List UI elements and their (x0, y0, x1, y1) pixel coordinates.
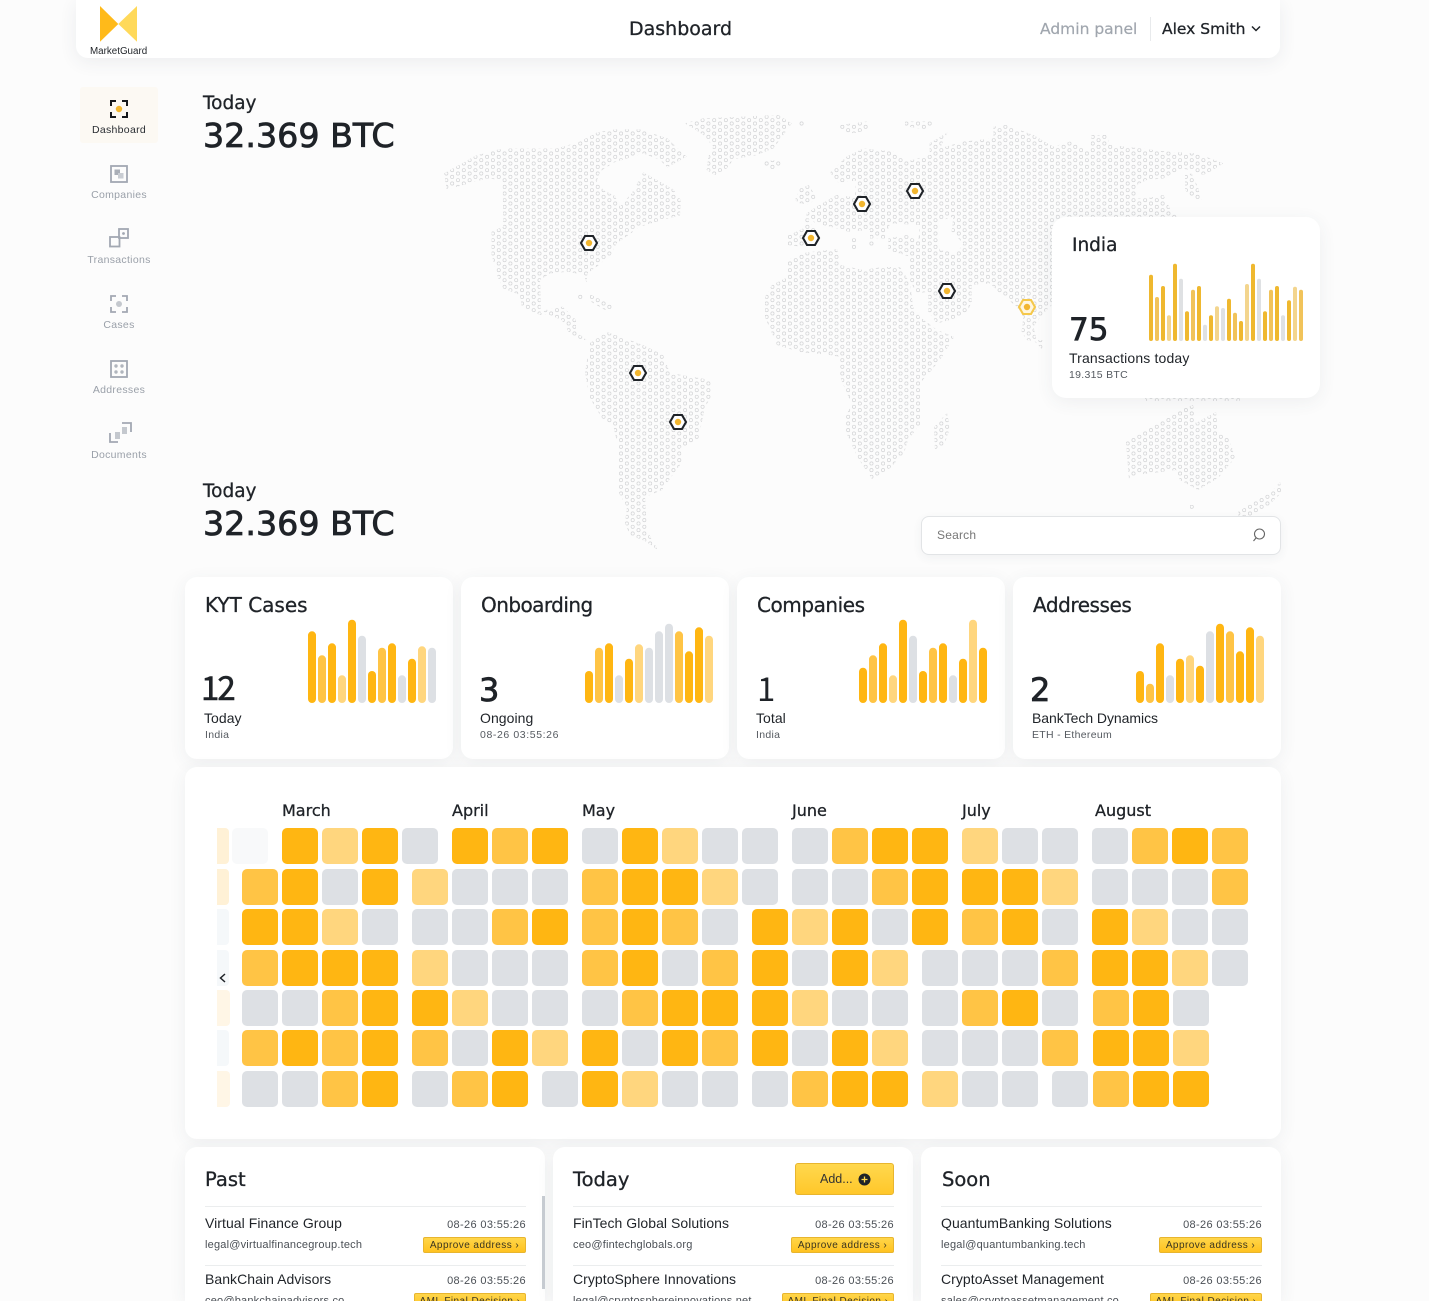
panel: india card (1052, 217, 1320, 398)
soon row 1: Approve address › (1166, 1240, 1255, 1251)
past row 1: legal@virtualfinancegroup.tech (205, 1239, 362, 1251)
soon row 2: CryptoAsset Management (941, 1271, 1104, 1287)
nav: documents (91, 422, 147, 461)
kyt sublabel: India (205, 729, 229, 741)
top header bar (76, 0, 1280, 58)
onboarding value: 3 (479, 671, 499, 709)
add button (795, 1163, 894, 1195)
panel: onboarding (461, 577, 729, 759)
today heading: Today (573, 1168, 629, 1191)
panel: past list (185, 1147, 545, 1301)
scrollbar (542, 1196, 545, 1289)
today total bottom (202, 481, 395, 543)
india bar chart (1149, 264, 1303, 341)
month labels: July (962, 801, 991, 820)
onboarding heading: Onboarding (481, 593, 593, 617)
today total bottom: Today (203, 481, 257, 502)
today row 1 (573, 1214, 894, 1253)
today total top (202, 93, 395, 155)
today row 2 (573, 1271, 894, 1301)
today row 2: CryptoSphere Innovations (573, 1271, 736, 1287)
logo (90, 6, 147, 57)
companies label: Total (756, 710, 786, 726)
heatmap grid (217, 828, 1248, 1107)
panel: soon list (921, 1147, 1281, 1301)
panel: calendar heatmap (185, 767, 1281, 1139)
nav: addresses: Addresses (93, 384, 145, 396)
month labels: June (792, 801, 827, 820)
past row 2: 08-26 03:55:26 (447, 1275, 526, 1287)
month labels (282, 801, 1151, 820)
panel: companies (737, 577, 1005, 759)
nav: addresses (93, 360, 145, 396)
soon row 1: 08-26 03:55:26 (1183, 1219, 1262, 1231)
month labels: May (582, 801, 615, 820)
addresses sublabel: ETH - Ethereum (1032, 729, 1112, 741)
month labels: April (452, 801, 489, 820)
past row 1 (205, 1214, 526, 1253)
nav: transactions: Transactions (87, 254, 151, 266)
addresses label: BankTech Dynamics (1032, 710, 1158, 726)
search box (921, 516, 1281, 555)
nav: companies (91, 165, 147, 201)
today row 2: 08-26 03:55:26 (815, 1275, 894, 1287)
today row 1: 08-26 03:55:26 (815, 1219, 894, 1231)
companies bar chart (859, 620, 988, 703)
today row 1: FinTech Global Solutions (573, 1214, 729, 1230)
icon: search (1253, 528, 1265, 542)
month labels: March (282, 801, 331, 820)
kyt heading: KYT Cases (205, 593, 308, 617)
kyt bar chart (308, 620, 436, 703)
india value: 75 (1069, 312, 1108, 348)
companies sublabel: India (756, 729, 780, 741)
past row 1: 08-26 03:55:26 (447, 1219, 526, 1231)
user menu (1150, 17, 1267, 41)
india label: Transactions today (1069, 350, 1189, 366)
panel: kyt cases (185, 577, 453, 759)
past row 2 (205, 1271, 526, 1301)
admin panel link: Admin panel (1040, 20, 1137, 38)
today total top: 32.369 BTC (203, 116, 395, 155)
soon row 1 (941, 1214, 1262, 1253)
addresses bar chart (1136, 624, 1264, 703)
kyt label: Today (204, 710, 242, 726)
soon row 2 (941, 1271, 1262, 1301)
page title: Dashboard (629, 18, 732, 40)
past row 1: Approve address › (430, 1240, 519, 1251)
nav: documents: Documents (91, 449, 147, 461)
world dot map (444, 115, 1281, 549)
onboarding bar chart (585, 624, 713, 703)
soon row 1: legal@quantumbanking.tech (941, 1239, 1086, 1251)
today row 1: Approve address › (798, 1240, 887, 1251)
onboarding label: Ongoing (480, 710, 533, 726)
soon heading: Soon (942, 1168, 991, 1191)
panel: addresses (1013, 577, 1281, 759)
soon row 1: QuantumBanking Solutions (941, 1214, 1112, 1230)
today total top: Today (203, 93, 257, 114)
nav: dashboard (80, 87, 158, 143)
onboarding sublabel: 08-26 03:55:26 (480, 729, 559, 741)
companies heading: Companies (757, 593, 865, 617)
nav: cases: Cases (103, 319, 135, 331)
search box: Search (937, 528, 976, 542)
kyt value: 12 (201, 662, 234, 710)
nav: companies: Companies (91, 189, 147, 201)
add button: Add... (820, 1172, 853, 1186)
past heading: Past (205, 1168, 246, 1191)
nav: transactions (87, 228, 151, 266)
addresses heading: Addresses (1033, 593, 1131, 617)
nav: dashboard: Dashboard (92, 124, 146, 136)
soon row 2: 08-26 03:55:26 (1183, 1275, 1262, 1287)
india amount: 19.315 BTC (1069, 369, 1128, 381)
nav: cases (103, 295, 135, 331)
panel: today list (553, 1147, 913, 1301)
today total bottom: 32.369 BTC (203, 504, 395, 543)
today row 1: ceo@fintechglobals.org (573, 1239, 693, 1251)
past row 1: Virtual Finance Group (205, 1214, 342, 1230)
india heading: India (1072, 235, 1117, 256)
user menu: Alex Smith (1162, 20, 1245, 38)
past row 2: BankChain Advisors (205, 1271, 331, 1287)
companies value: 1 (757, 663, 775, 711)
month labels: August (1095, 801, 1151, 820)
logo: MarketGuard (90, 46, 147, 57)
addresses value: 2 (1030, 671, 1050, 709)
